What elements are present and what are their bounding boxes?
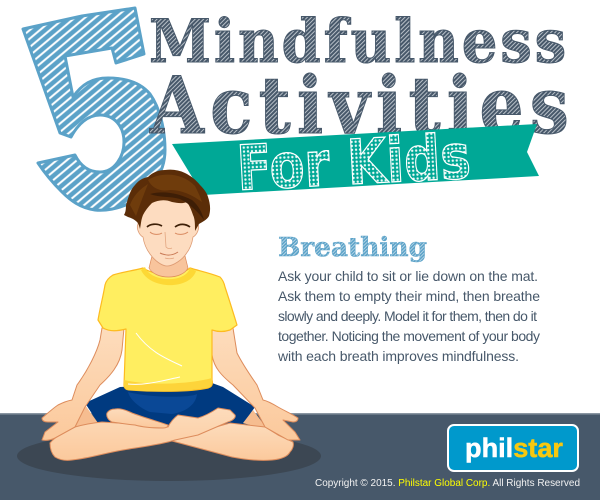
philstar logo: philstar xyxy=(465,433,563,463)
tucked foot xyxy=(107,409,168,428)
calf shading xyxy=(72,405,268,430)
shorts xyxy=(85,383,255,426)
ground shadow xyxy=(17,431,321,481)
title: Mindfulness: Mindfulness xyxy=(149,7,569,77)
body text: with each breath improves mindfulness. xyxy=(277,348,519,364)
body text: together. Noticing the movement of your body xyxy=(278,328,540,344)
teal ribbon banner xyxy=(172,120,539,205)
near leg and foot xyxy=(50,408,235,460)
footer band xyxy=(0,413,600,500)
yellow shirt xyxy=(98,267,237,391)
big number 5 xyxy=(23,8,165,210)
ribbon text: For Kids: For Kids xyxy=(235,120,472,205)
body text xyxy=(277,268,540,364)
philstar logo xyxy=(448,425,578,471)
facial features xyxy=(147,224,190,259)
face xyxy=(137,198,199,266)
hair xyxy=(124,170,210,231)
far leg xyxy=(172,423,293,460)
body text: slowly and deeply. Model it for them, then do it xyxy=(278,308,537,324)
neck xyxy=(149,256,188,277)
crossed legs xyxy=(50,408,293,460)
body text: Ask your child to sit or lie down on the mat. xyxy=(278,268,538,284)
illustration: meditating boy xyxy=(42,170,300,460)
copyright line: Copyright © 2015. Philstar Global Corp. All Rights Reserved xyxy=(315,478,580,489)
right arm and hand xyxy=(212,328,300,440)
body text: Ask them to empty their mind, then breathe xyxy=(278,288,540,304)
section heading: Breathing xyxy=(278,233,427,263)
left arm and hand xyxy=(42,328,124,440)
